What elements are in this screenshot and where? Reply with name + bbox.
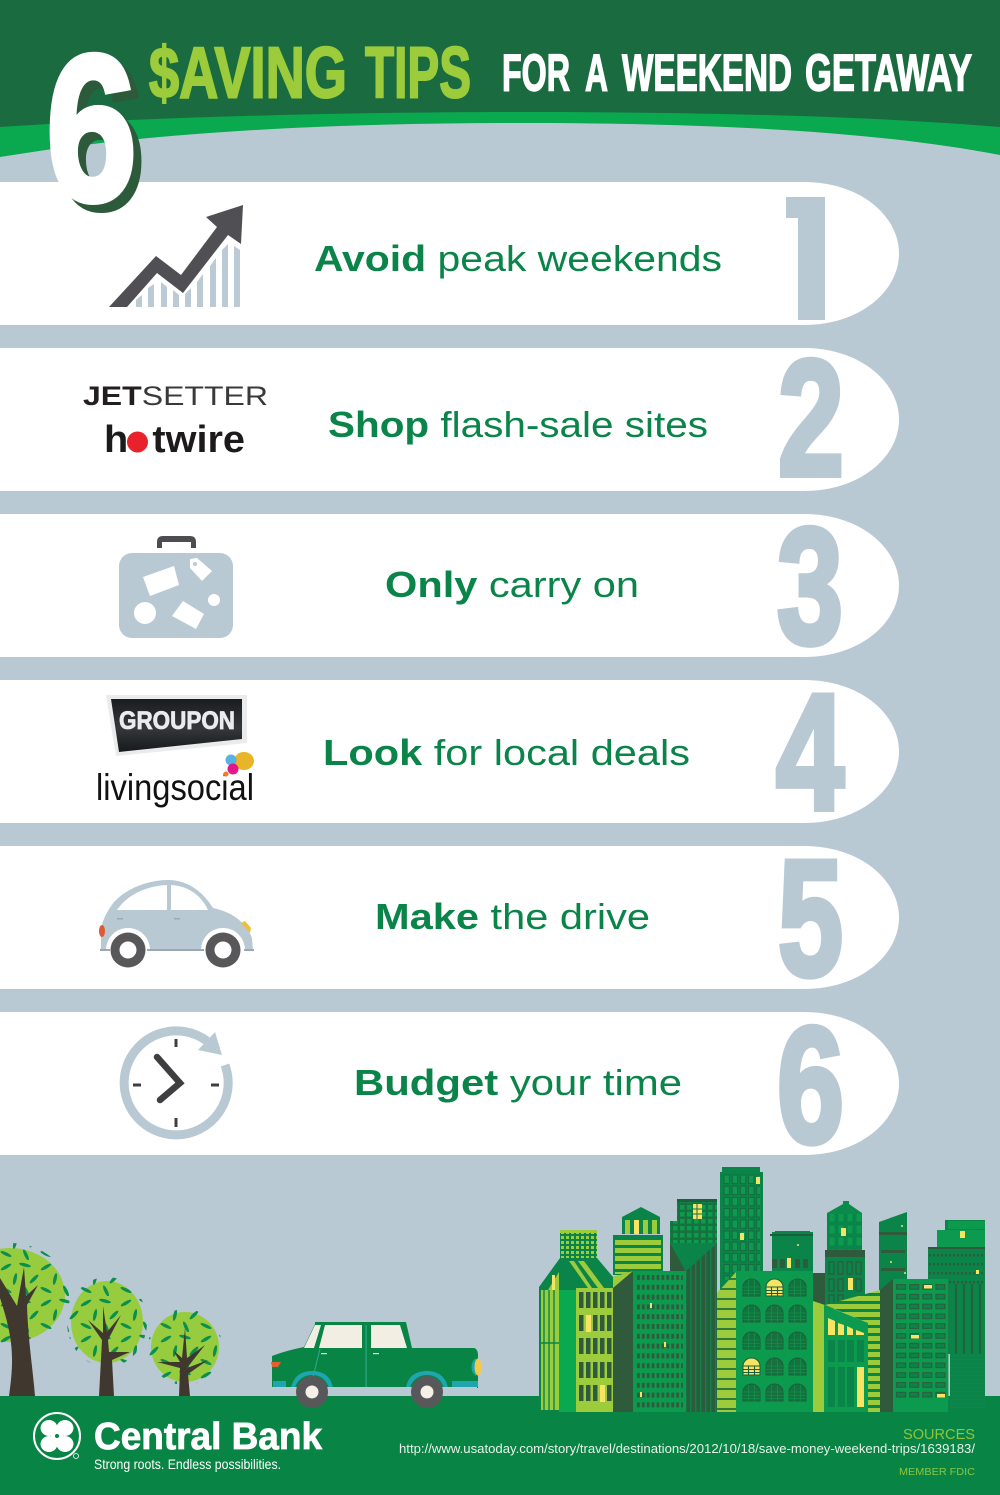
tip 3 text: Only carry on [385, 564, 639, 605]
ground band [0, 1396, 1000, 1495]
title: saving tips: $AVING [149, 34, 347, 114]
title: saving tips: TIPS [365, 34, 471, 114]
tip row 6 panel [0, 1012, 899, 1155]
numeral 1: 1 [772, 165, 848, 364]
logos: groupon and livingsocial: livingsocial [96, 767, 254, 808]
tip row 3 panel [0, 514, 899, 657]
icon: rising chart arrow [109, 205, 243, 307]
logos: jetsetter and hotwire: JET SETTER [83, 381, 268, 411]
brand name: Central Bank [94, 1416, 323, 1458]
building: right windowed block [880, 1279, 948, 1412]
building: behind left tower [670, 1199, 717, 1412]
numeral 5: 5 [778, 826, 843, 1010]
tip 6 text: Budget your time [354, 1062, 682, 1103]
logos: jetsetter and hotwire [83, 381, 268, 461]
numeral 3: 3 [777, 494, 843, 678]
title: for a weekend getaway: FOR [502, 44, 570, 102]
title: for a weekend getaway: A [585, 44, 608, 102]
numeral 2: 2 [778, 326, 844, 510]
sources heading: SOURCES [903, 1426, 975, 1443]
central bank logo [34, 1413, 323, 1472]
tip row 4 panel [0, 680, 899, 823]
logo emblem [34, 1413, 80, 1459]
tree 2 [67, 1277, 147, 1396]
title: for a weekend getaway: WEEKEND [622, 44, 792, 102]
tip row 5 panel [0, 846, 899, 989]
tip row 1 panel [0, 182, 899, 325]
green sedan [271, 1322, 482, 1408]
city skyline [539, 1167, 985, 1412]
numeral 1 [786, 197, 825, 320]
numeral 6: 6 [777, 993, 844, 1177]
building: narrow round tower [879, 1212, 907, 1290]
tip 2 text: Shop flash-sale sites [328, 404, 708, 445]
building: left slanted roof [539, 1230, 613, 1412]
tip 5 text: Make the drive [375, 896, 650, 937]
icon: small grey car [99, 880, 254, 972]
source url: http://www.usatoday.com/story/travel/destinations/2012/10/18/save-money-weekend-trips/1639183/ [399, 1442, 976, 1456]
tagline: Strong roots. Endless possibilities. [94, 1456, 281, 1472]
tree 1 [0, 1243, 70, 1396]
tip 1 text: Avoid peak weekends [314, 238, 722, 279]
big numeral 6 in title: 6 [54, 21, 145, 253]
building: central right tower [813, 1201, 865, 1309]
icon: clock with arrow [124, 1031, 228, 1135]
building: left crown tower [613, 1207, 663, 1275]
logos: jetsetter and hotwire: hotwire [104, 419, 245, 461]
big numeral 6 in title: 6 [46, 13, 137, 245]
building: glass atrium [813, 1290, 880, 1412]
header band [0, 0, 1000, 157]
building: right back tower [928, 1220, 985, 1408]
title: for a weekend getaway [502, 44, 972, 102]
numeral 4: 4 [776, 660, 844, 844]
tip 4 text: Look for local deals [323, 732, 690, 773]
logos: groupon and livingsocial [96, 695, 254, 808]
tree 3 [148, 1309, 222, 1396]
icon: suitcase [119, 536, 233, 638]
building: office block [613, 1271, 686, 1412]
building: dark low tower [770, 1231, 813, 1275]
logos: groupon and livingsocial: GROUPON [119, 707, 235, 735]
tip row 2 panel [0, 348, 899, 491]
building: central arched block [717, 1271, 813, 1412]
building: tall tower [720, 1167, 763, 1290]
member fdic: MEMBER FDIC [899, 1467, 975, 1478]
